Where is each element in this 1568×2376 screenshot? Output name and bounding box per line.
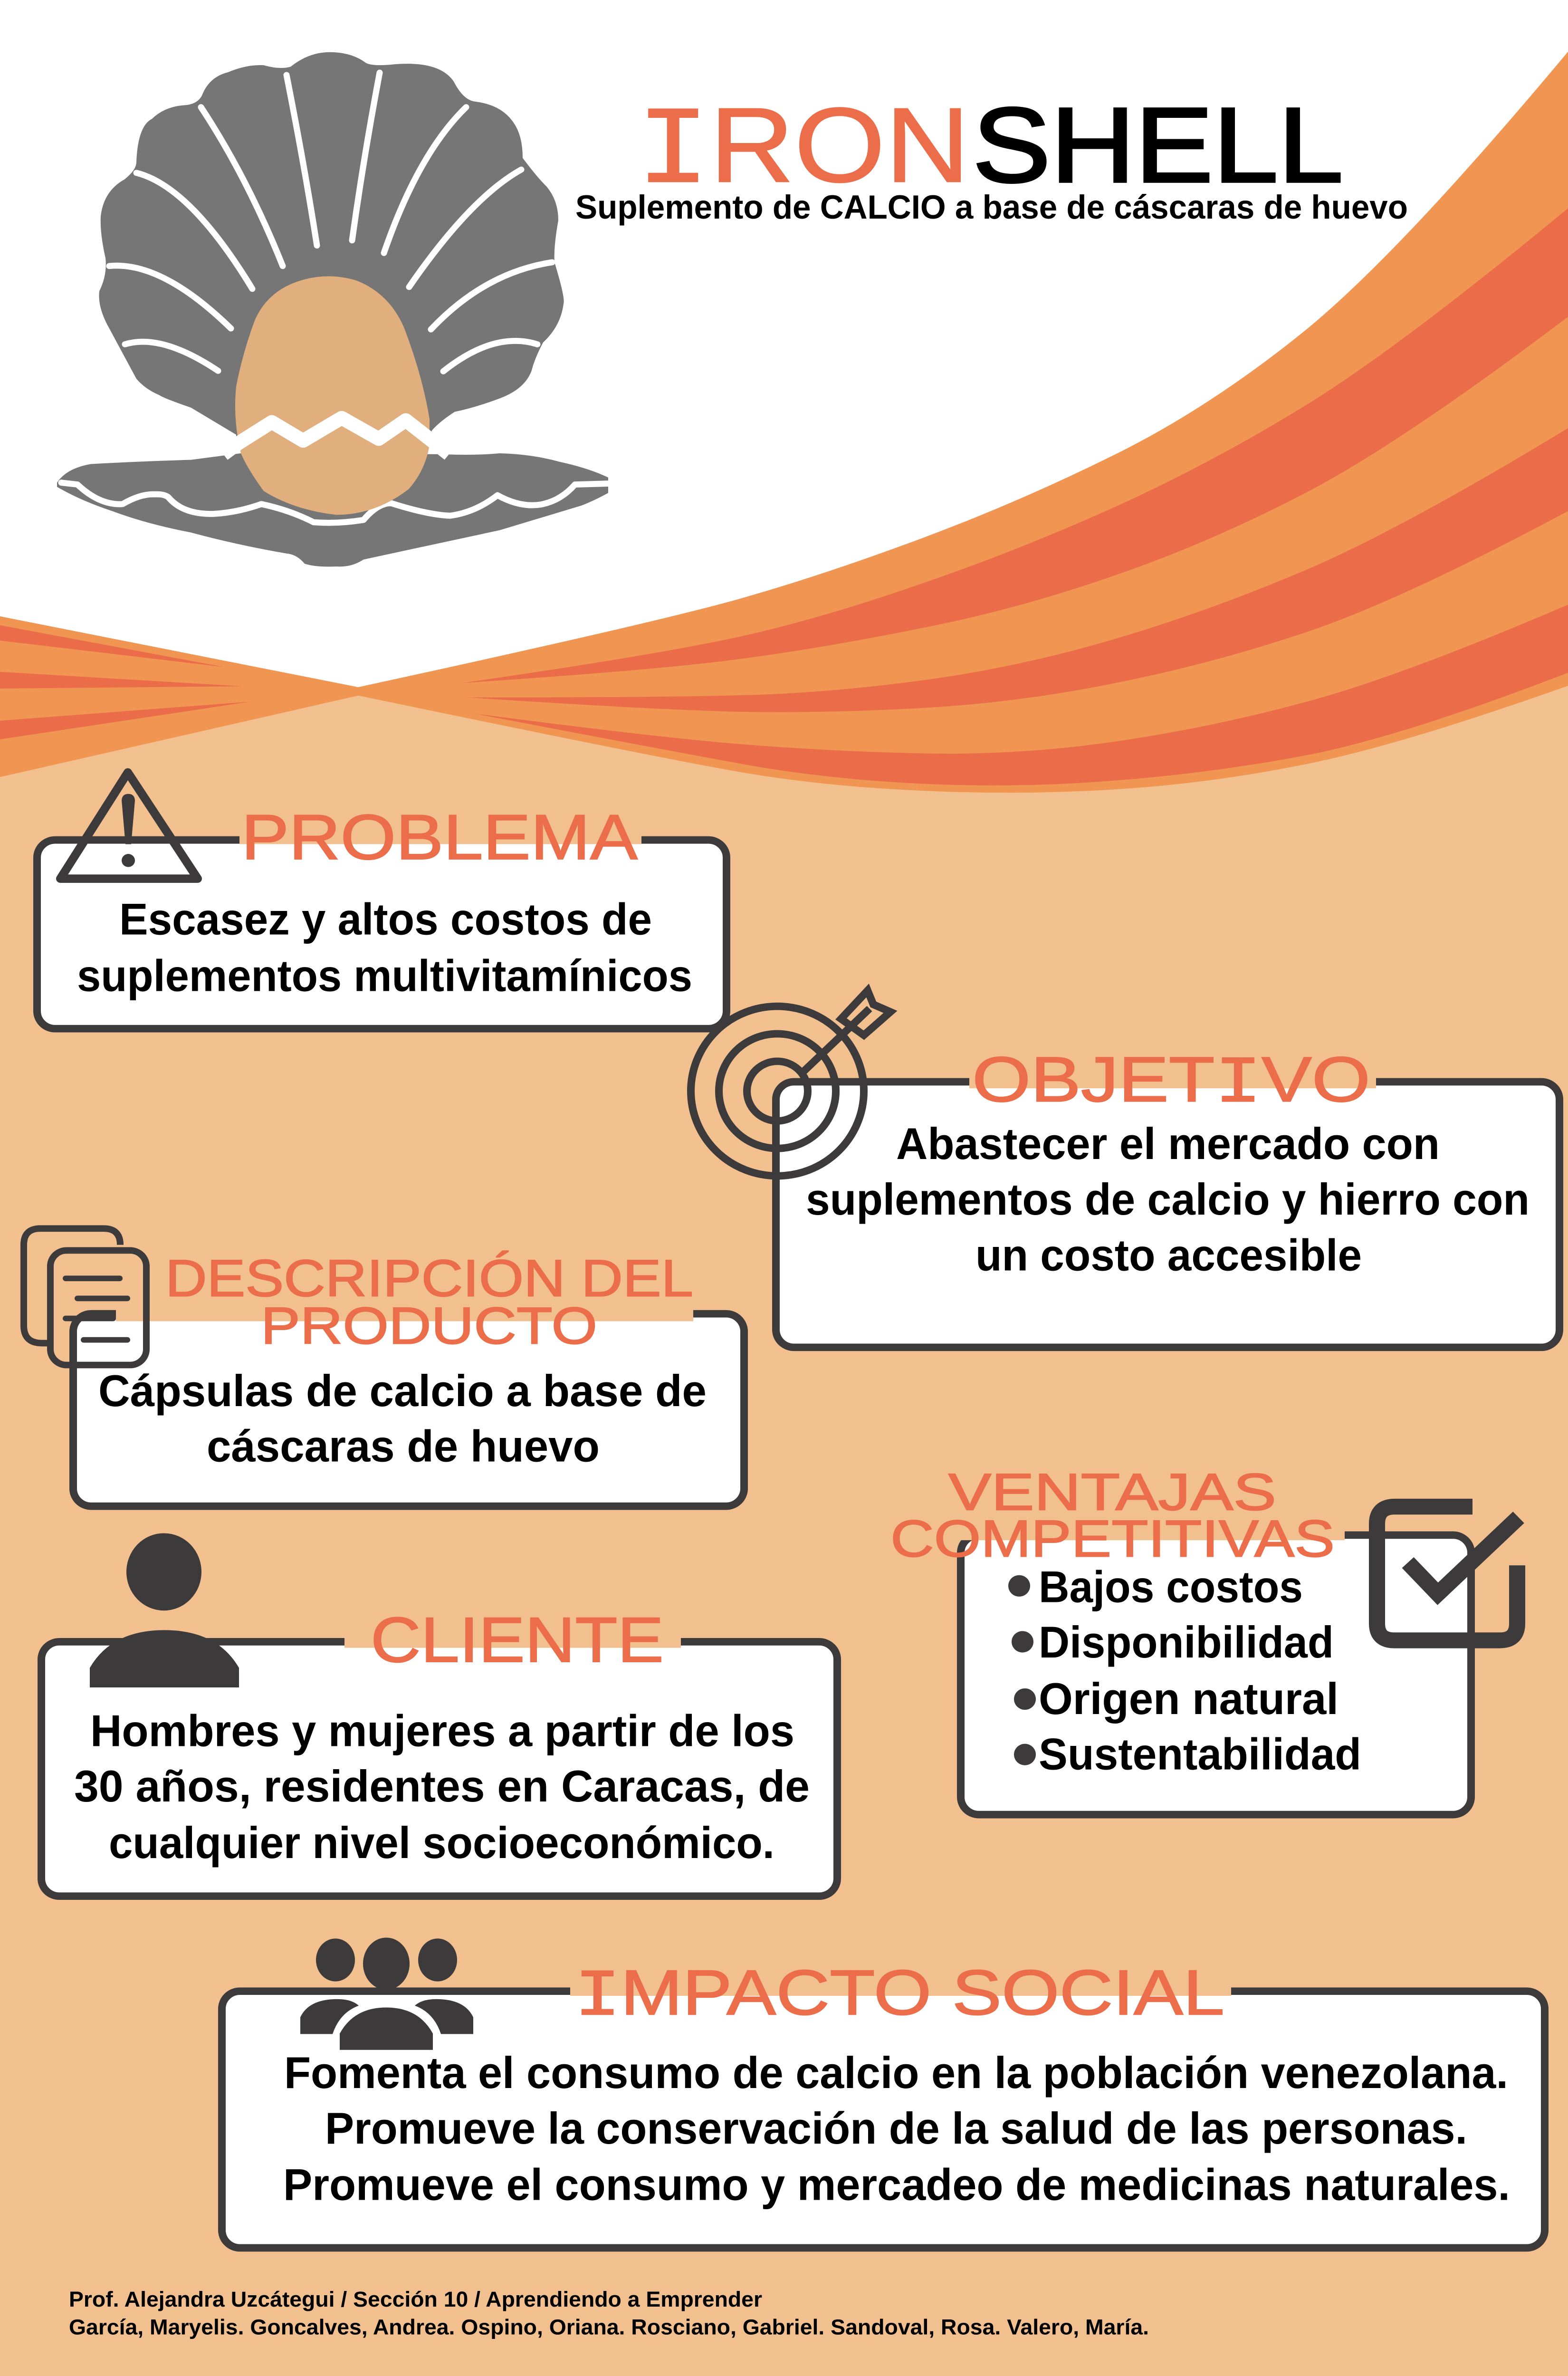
ventajas heading xyxy=(890,1463,1335,1568)
panel: cliente xyxy=(41,1533,837,1896)
logo: shell with egg xyxy=(57,52,608,567)
title: iron: IRON xyxy=(637,86,970,215)
problema heading: PROBLEMA xyxy=(241,801,638,873)
footer credits: García, Maryelis. Goncalves, Andrea. Ospino, Oriana. Rosciano, Gabriel. Sandoval, Rosa. Valero, María. xyxy=(69,2315,1149,2339)
panel: ventajas competitivas xyxy=(890,1463,1519,1815)
objetivo text: Abastecer el mercado con xyxy=(896,1119,1440,1169)
cliente box xyxy=(41,1642,837,1896)
ventajas heading: VENTAJAS xyxy=(948,1463,1276,1521)
objetivo box xyxy=(776,1082,1559,1347)
cliente heading: CLIENTE xyxy=(371,1604,664,1676)
bullet list xyxy=(1008,1562,1361,1779)
descripcion text: Cápsulas de calcio a base de xyxy=(98,1366,707,1416)
problema box xyxy=(37,840,727,1029)
cliente text xyxy=(74,1706,810,1868)
ventajas heading: COMPETITIVAS xyxy=(890,1509,1335,1568)
ventajas box xyxy=(961,1535,1471,1815)
problema text: Escasez y altos costos de xyxy=(119,895,652,944)
icon: target with arrow xyxy=(691,990,890,1176)
descripcion heading: PRODUCTO xyxy=(261,1296,597,1355)
descripcion text: cáscaras de huevo xyxy=(207,1421,600,1471)
subtitle: Suplemento de CALCIO a base de cáscaras de huevo xyxy=(575,188,1408,226)
descripcion heading xyxy=(165,1249,693,1355)
lower shell wave xyxy=(61,483,608,523)
ribbon base orange xyxy=(0,52,1568,793)
egg xyxy=(235,276,430,515)
footer credits: Prof. Alejandra Uzcátegui / Sección 10 / Aprendiendo a Emprender xyxy=(69,2287,762,2311)
descripcion box xyxy=(73,1314,744,1506)
cliente text: Hombres y mujeres a partir de los xyxy=(90,1706,794,1756)
objetivo text: un costo accesible xyxy=(975,1230,1362,1280)
shell ribs xyxy=(109,73,552,371)
cliente text: 30 años, residentes en Caracas, de xyxy=(74,1762,810,1811)
panel: descripcion del producto xyxy=(24,1228,744,1506)
bullet list: Sustentabilidad xyxy=(1039,1729,1361,1779)
cliente text: cualquier nivel socioeconómico. xyxy=(109,1818,774,1868)
impacto text: Promueve el consumo y mercadeo de medicinas naturales. xyxy=(283,2160,1510,2210)
impacto heading: IMPACTO SOCIAL xyxy=(574,1956,1224,2035)
impacto text: Promueve la conservación de la salud de las personas. xyxy=(325,2104,1467,2154)
panel: impacto social xyxy=(222,1937,1545,2248)
bullet list: Disponibilidad xyxy=(1039,1618,1334,1667)
icon: warning triangle xyxy=(60,772,198,879)
problema text: suplementos multivitamínicos xyxy=(77,951,692,1001)
egg crack xyxy=(223,418,449,454)
icon: group of people xyxy=(300,1937,473,2050)
icon: documents xyxy=(24,1228,146,1365)
problema text xyxy=(77,895,692,1001)
descripcion heading: DESCRIPCIÓN DEL xyxy=(165,1249,693,1307)
objetivo text: suplementos de calcio y hierro con xyxy=(806,1175,1530,1225)
bullet list: Bajos costos xyxy=(1039,1562,1303,1612)
icon: checkbox xyxy=(1377,1507,1519,1640)
objetivo text xyxy=(806,1119,1530,1280)
upper shell xyxy=(99,52,564,447)
descripcion text xyxy=(98,1366,707,1471)
title: shell: SHELL xyxy=(973,86,1343,204)
impacto text xyxy=(283,2048,1510,2210)
objetivo heading: OBJET IVO xyxy=(972,1044,1370,1121)
ribbon wave xyxy=(0,52,1568,793)
icon: person xyxy=(90,1533,239,1687)
lower shell xyxy=(57,453,608,567)
panel: problema xyxy=(37,772,727,1029)
impacto text: Fomenta el consumo de calcio en la población venezolana. xyxy=(284,2048,1508,2098)
title xyxy=(637,86,1343,215)
panel: objetivo xyxy=(691,990,1559,1347)
footer credits xyxy=(69,2287,1149,2339)
impacto box xyxy=(222,1991,1545,2248)
bullet list: Origen natural xyxy=(1039,1674,1339,1724)
ribbon red stripes xyxy=(0,208,1568,786)
white top background xyxy=(0,0,1568,687)
